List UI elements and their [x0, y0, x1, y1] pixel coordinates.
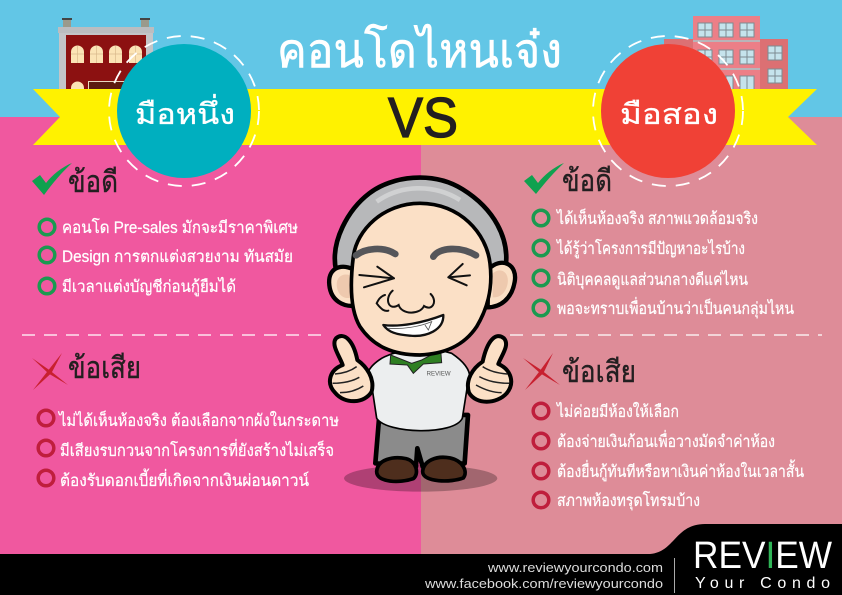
- yellow ribbon banner: [33, 89, 817, 145]
- mascot hair: [335, 178, 506, 270]
- panel: second-hand cons: สภาพห้องทรุดโทรมบ้าง: [557, 491, 700, 511]
- panel: second-hand cons: ไม่ค่อยมีห้องให้เลือก: [555, 402, 679, 421]
- mascot: smiling old man with thumbs up: [329, 178, 515, 492]
- icon: old red building: [58, 18, 154, 90]
- badge: second hand: มือสอง: [620, 99, 718, 131]
- badge: second hand: [593, 36, 743, 186]
- panel: second-hand pros: พอจะทราบเพื่อนบ้านว่าเป็นคนกลุ่มไหน: [557, 297, 794, 319]
- icon: red cross: [523, 353, 560, 390]
- icon: pink condo building: [664, 16, 788, 90]
- panel: left pink background: [0, 117, 421, 557]
- footer bar with logo tab: [0, 524, 842, 595]
- panel: second-hand cons: ต้องยื่นกู้ทันทีหรือหาเงินค่าห้องในเวลาสั้น: [557, 459, 804, 482]
- badge: first hand: [109, 36, 259, 186]
- mascot legs: [375, 415, 468, 467]
- mascot nose: [377, 291, 434, 313]
- panel: first-hand pros: คอนโด Pre-sales มักจะมีราคาพิเศษ: [62, 218, 298, 237]
- panel: right rose background: [421, 117, 842, 557]
- mascot face: [351, 203, 491, 355]
- logo: review your condo: REVIEW: [693, 535, 832, 577]
- panel: first-hand cons: ไม่ได้เห็นห้องจริง ต้องเลือกจากผังในกระดาษ: [57, 410, 339, 430]
- footer divider: [674, 558, 675, 593]
- heading: pros: ข้อดี: [68, 166, 118, 199]
- panel: second-hand cons: ต้องจ่ายเงินก้อนเพื่อวางมัดจำค่าห้อง: [557, 430, 775, 451]
- mascot shoes: [377, 457, 465, 481]
- panel: first-hand cons: [32, 352, 339, 490]
- footer website links: www.facebook.com/reviewyourcondo: [424, 576, 663, 591]
- mascot eyes: [359, 264, 470, 287]
- heading: cons: ข้อเสีย: [562, 356, 636, 389]
- panel: second-hand pros: ได้เห็นห้องจริง สภาพแวดล้อมจริง: [555, 208, 758, 228]
- mascot collar: [390, 350, 442, 373]
- panel: second-hand pros: นิติบุคคลดูแลส่วนกลางดีแค่ไหน: [557, 270, 748, 290]
- panel: first-hand pros: Design การตกแต่งสวยงาม ทันสมัย: [62, 248, 293, 266]
- heading: pros: ข้อดี: [562, 165, 612, 198]
- mascot smile: [383, 315, 443, 336]
- panel: first-hand cons: ต้องรับดอกเบี้ยที่เกิดจากเงินผ่อนดาวน์: [60, 468, 309, 490]
- logo: review your condo: Your Condo: [695, 575, 830, 592]
- mascot left hand: [330, 336, 372, 401]
- shirt logo: REVIEW: [427, 372, 451, 378]
- footer website links: [424, 560, 663, 591]
- mascot right hand: [468, 336, 511, 402]
- panel: first-hand cons: มีเสียงรบกวนจากโครงการที่ยังสร้างไม่เสร็จ: [60, 439, 334, 460]
- mascot eyebrows: [356, 249, 476, 257]
- mascot shirt: [367, 349, 470, 431]
- panel: second-hand pros: ได้รู้ว่าโครงการมีปัญหาอะไรบ้าง: [555, 239, 745, 259]
- panel: second-hand cons: [523, 353, 804, 511]
- icon: red cross: [32, 353, 68, 390]
- panel: second-hand pros: [524, 163, 794, 319]
- mascot ears: [329, 263, 515, 307]
- sky background: [0, 0, 842, 117]
- icon: green check: [32, 163, 72, 195]
- mascot shadow: [344, 465, 497, 492]
- badge: first hand: มือหนึ่ง: [135, 94, 235, 131]
- footer website links: www.reviewyourcondo.com: [487, 560, 663, 575]
- title: คอนโดไหนเจ๋ง: [277, 23, 562, 78]
- VS label: VS: [388, 86, 458, 150]
- icon: green check: [524, 163, 564, 194]
- panel: first-hand pros: มีเวลาแต่งบัญชีก่อนกู้ยืมได้: [62, 277, 236, 297]
- panel: first-hand pros: [32, 163, 298, 297]
- heading: cons: ข้อเสีย: [68, 352, 141, 385]
